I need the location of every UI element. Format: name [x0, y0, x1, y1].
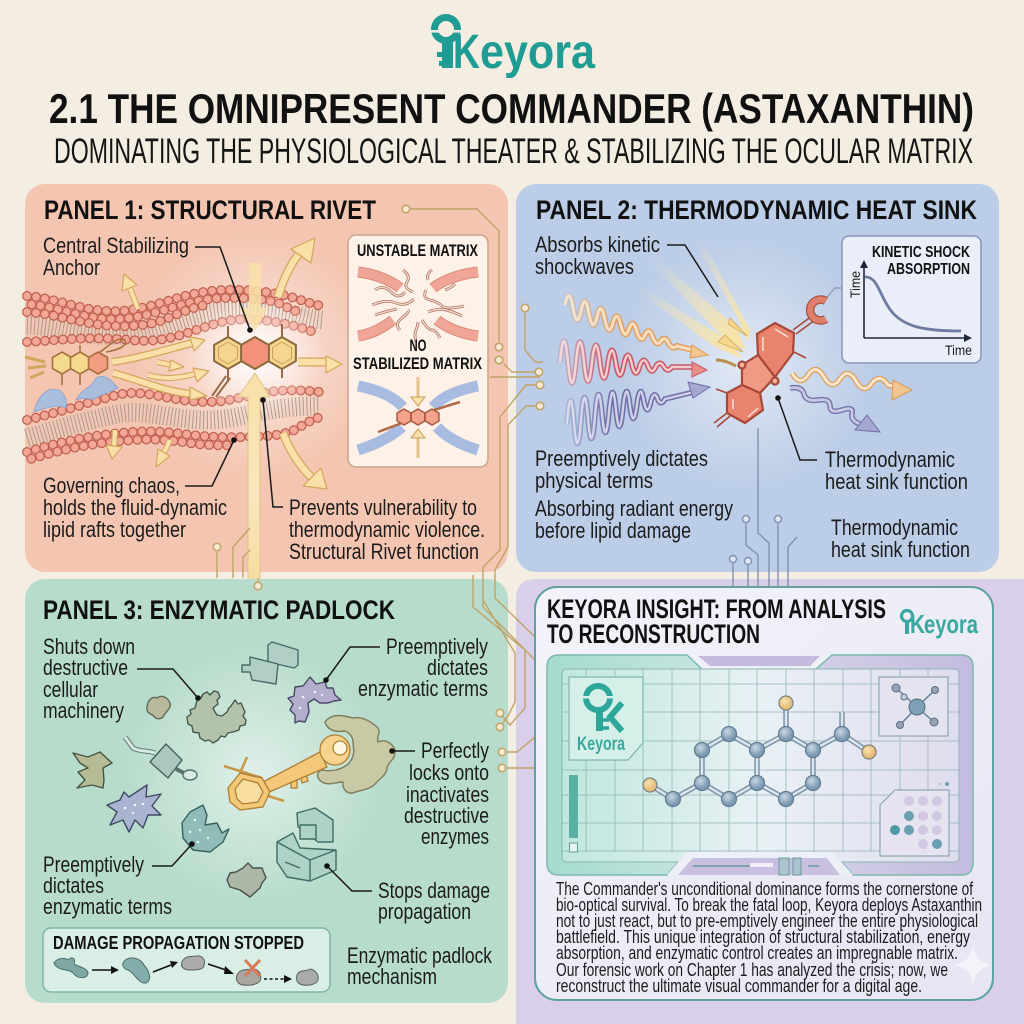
- claw group: [810, 300, 826, 320]
- leader: prevents vulnerability: [260, 397, 283, 507]
- insight heading: TO RECONSTRUCTION: [547, 619, 760, 649]
- yellow energy beams: [636, 243, 750, 358]
- status bar: [569, 775, 578, 852]
- label: absorbing radiant energy: [535, 496, 733, 543]
- enzyme: zigzag: [73, 752, 112, 788]
- inset chart: kinetic shock absorption: KINETIC SHOCK: [872, 244, 970, 261]
- label: perfectly locks: locks onto: [409, 760, 489, 785]
- damage propagation strip: DAMAGE PROPAGATION STOPPED: [53, 932, 304, 953]
- enzyme: large notched: [187, 691, 246, 743]
- label: preemptively dictates physical terms: Preemptively dictates: [535, 446, 708, 471]
- leader: governing chaos: [185, 437, 237, 486]
- label: shuts down: cellular: [43, 677, 98, 702]
- inset: unstable vs stabilized matrix: UNSTABLE MATRIX: [357, 241, 478, 260]
- label: shuts down: [43, 634, 135, 723]
- label: governing chaos: Governing chaos,: [43, 473, 180, 498]
- label: prevents vulnerability: [289, 495, 485, 564]
- label: central stabilizing anchor: Anchor: [43, 255, 100, 280]
- label: thermodynamic heat sink function lower: heat sink function: [831, 537, 970, 562]
- label: absorbs kinetic shockwaves: Absorbs kinetic: [535, 232, 660, 257]
- enzyme: inactivated blob: [318, 716, 395, 793]
- wave: red radiant: [560, 341, 707, 383]
- circuit traces tan: [213, 205, 544, 772]
- wave: orange radiant: [565, 296, 708, 358]
- label: thermodynamic heat sink function lower: Thermodynamic: [831, 515, 958, 540]
- label: central stabilizing anchor: Central Stabilizing: [43, 233, 189, 258]
- padlock block: [277, 808, 336, 881]
- label: thermodynamic heat sink function: heat sink function: [825, 469, 968, 494]
- wave: purple radiant: [567, 382, 710, 444]
- unstable bands and debris: [358, 270, 478, 342]
- label: preemptively dictates right: dictates: [427, 655, 488, 680]
- label: prevents vulnerability: thermodynamic violence.: [289, 517, 485, 542]
- panel 4 background: [516, 579, 1024, 1024]
- leader: thermodynamic heat sink: [775, 395, 817, 460]
- label: enzymatic padlock mechanism: mechanism: [347, 964, 437, 989]
- label: preemptively dictates physical terms: [535, 446, 708, 493]
- logo: small Keyora: [902, 609, 978, 639]
- screen logo tile: Keyora: [577, 734, 625, 755]
- inset: unstable vs stabilized matrix: NO: [410, 336, 426, 355]
- inset chart: kinetic shock absorption: Time: [945, 343, 972, 358]
- central rivet molecule: [212, 324, 296, 397]
- stress arrows: [106, 238, 342, 580]
- insight heading: [547, 594, 886, 649]
- enzyme: gray blob: [227, 863, 266, 897]
- chart connector: [827, 288, 843, 297]
- label: perfectly locks: destructive: [404, 803, 489, 828]
- damage propagation strip: [43, 928, 330, 992]
- stabilized bands and molecule: [358, 377, 478, 458]
- inset chart: kinetic shock absorption: ABSORPTION: [887, 261, 970, 278]
- enzyme: spiky star: [107, 785, 161, 832]
- label: thermodynamic heat sink function: Thermodynamic: [825, 447, 955, 472]
- label: preemptively dictates right: enzymatic terms: [358, 676, 488, 701]
- label: preemptively dictates left: [43, 852, 172, 919]
- screen grid: [562, 669, 959, 852]
- label: preemptively dictates left: dictates: [43, 873, 104, 898]
- small molecule left: [25, 339, 126, 385]
- center glow over membrane: [185, 295, 325, 415]
- label: absorbing radiant energy: Absorbing radiant energy: [535, 496, 733, 521]
- label: perfectly locks: [404, 738, 489, 849]
- label: perfectly locks: enzymes: [421, 824, 489, 849]
- label: preemptively dictates right: Preemptively: [386, 634, 488, 659]
- heat sink molecule: [714, 300, 826, 427]
- blue lipid blobs: [34, 376, 118, 412]
- keyora insight card: [535, 587, 993, 1000]
- label: governing chaos: [43, 473, 227, 542]
- label: shuts down: machinery: [43, 698, 124, 723]
- leader: central stabilizing anchor: [195, 247, 253, 333]
- label: governing chaos: lipid rafts together: [43, 517, 186, 542]
- holographic screen: [547, 655, 973, 875]
- wave: orange output: [792, 369, 912, 400]
- label: prevents vulnerability: Structural Rivet function: [289, 539, 479, 564]
- wave: purple output: [790, 388, 880, 432]
- screen molecule: [643, 696, 876, 806]
- inset: unstable vs stabilized matrix: [348, 235, 488, 467]
- enzyme: teal chomp: [182, 805, 229, 852]
- label: preemptively dictates physical terms: physical terms: [535, 468, 653, 493]
- label: stops damage: Stops damage: [378, 878, 490, 903]
- label: preemptively dictates left: Preemptively: [43, 852, 144, 877]
- label: perfectly locks: Perfectly: [421, 738, 489, 763]
- label: thermodynamic heat sink function lower: [831, 515, 970, 562]
- circuit traces blue: [730, 428, 797, 587]
- logo: small Keyora: K: [910, 609, 925, 639]
- label: absorbs kinetic shockwaves: shockwaves: [535, 254, 634, 279]
- insight paragraph: reconstruct the ultimate visual commander for a digital age.: [556, 976, 922, 996]
- dot matrix tile: [880, 782, 949, 856]
- label: preemptively dictates right: [358, 634, 488, 701]
- enzyme: purple arch: [288, 677, 341, 723]
- sparkle: [954, 945, 992, 985]
- label: absorbing radiant energy: before lipid damage: [535, 518, 691, 543]
- mini molecule tile: [879, 677, 948, 736]
- label: prevents vulnerability: Prevents vulnerability to: [289, 495, 477, 520]
- label: stops damage: propagation: [378, 899, 471, 924]
- insight heading: KEYORA INSIGHT: FROM ANALYSIS: [547, 594, 886, 624]
- label: thermodynamic heat sink function: [825, 447, 968, 494]
- enzyme: teal blocks: [242, 642, 298, 684]
- enzyme: hooked machine: [125, 737, 197, 780]
- label: shuts down: destructive: [43, 655, 128, 680]
- label: preemptively dictates left: enzymatic terms: [43, 894, 172, 919]
- label: enzymatic padlock mechanism: [347, 943, 493, 989]
- logo: Keyora header: eyora: [480, 26, 595, 79]
- label: enzymatic padlock mechanism: Enzymatic padlock: [347, 943, 493, 968]
- panel 1 heading: PANEL 1: STRUCTURAL RIVET: [44, 195, 376, 225]
- inset chart: kinetic shock absorption: Time: [848, 271, 863, 298]
- insight paragraph: [556, 879, 982, 996]
- enzyme: small blob: [147, 696, 170, 719]
- leaders panel 3: [137, 647, 415, 891]
- panel 3: enzymatic padlock: [25, 579, 508, 1003]
- logo: Keyora header: K: [453, 26, 480, 79]
- inset: unstable vs stabilized matrix: STABILIZED MATRIX: [353, 354, 483, 373]
- panel 3 heading: PANEL 3: ENZYMATIC PADLOCK: [43, 595, 395, 625]
- label: stops damage: [378, 878, 490, 924]
- label: perfectly locks: inactivates: [406, 782, 489, 807]
- label: shuts down: Shuts down: [43, 634, 135, 659]
- screen logo tile: [569, 677, 643, 760]
- leader: absorbs kinetic shockwaves: [667, 245, 718, 297]
- label: central stabilizing anchor: [43, 233, 189, 280]
- panel 2: thermodynamic heat sink: [516, 184, 999, 572]
- lipid membrane illustration: [27, 290, 322, 460]
- logo: Keyora header: [429, 18, 595, 79]
- label: absorbs kinetic shockwaves: [535, 232, 660, 279]
- label: governing chaos: holds the fluid-dynamic: [43, 495, 227, 520]
- panel 1: structural rivet: [25, 184, 508, 580]
- inset chart: kinetic shock absorption: [842, 236, 981, 363]
- logo: small Keyora: eyora: [924, 609, 978, 639]
- golden key: [224, 735, 350, 810]
